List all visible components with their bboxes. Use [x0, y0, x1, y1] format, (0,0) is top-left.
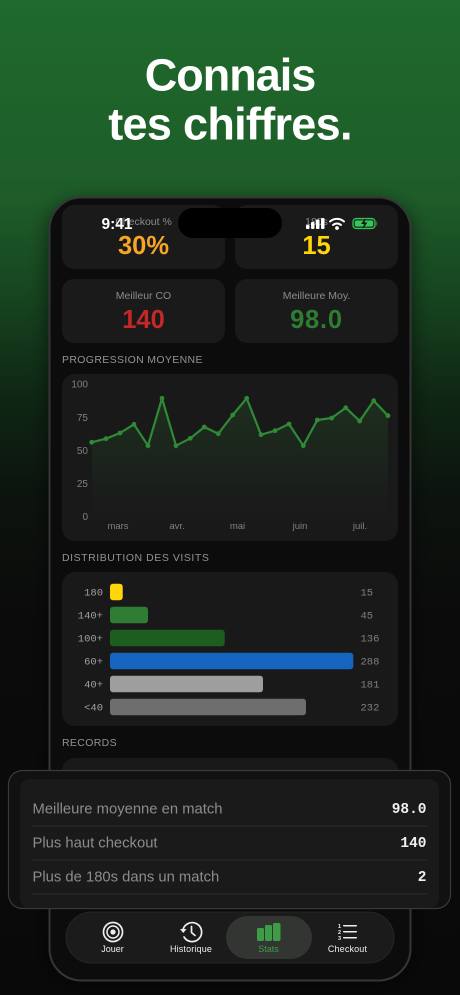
record row: best match average: Meilleure moyenne en match	[32, 802, 222, 818]
chart x axis labels: avr.	[169, 521, 185, 532]
bar row under 40	[84, 699, 379, 715]
chart y axis labels	[71, 380, 88, 523]
bar row 100+	[78, 630, 379, 646]
chart x axis labels: mars	[107, 521, 129, 532]
chart x axis labels: mai	[230, 521, 245, 532]
stat card: best checkout	[62, 279, 225, 343]
bar row 180: 15	[360, 588, 373, 600]
bar row 140+: 45	[360, 610, 373, 622]
selected tab pill	[226, 916, 312, 959]
phone shadow	[46, 200, 414, 985]
stat card: checkout: Checkout %	[115, 216, 172, 228]
phone frame	[50, 198, 410, 980]
record row: best match average	[32, 802, 428, 826]
chart line	[89, 396, 390, 448]
record row: most 180s: Plus de 180s dans un match	[32, 870, 219, 886]
title: Connais	[145, 50, 315, 100]
bar row under 40: 232	[360, 702, 379, 714]
chart area fill	[92, 398, 388, 516]
chart x axis labels: juil.	[352, 521, 367, 532]
chart y axis labels: 50	[77, 446, 88, 457]
bar row 40+: 181	[360, 680, 379, 692]
tab: Historique: Historique	[170, 944, 212, 954]
bar row 60+: 288	[360, 656, 379, 668]
tab: Checkout	[328, 924, 367, 954]
title: tes chiffres.	[108, 98, 352, 150]
panel: bar chart	[62, 572, 398, 726]
icon: battery	[353, 218, 377, 229]
bar row 100+: 136	[360, 634, 379, 646]
tab: Stats	[257, 923, 280, 954]
icon: wifi	[330, 219, 344, 229]
dynamic island	[178, 208, 282, 238]
tab: Historique	[170, 923, 212, 954]
stat card: 180s: 180s	[305, 216, 328, 228]
tab: Jouer	[101, 922, 124, 954]
stat card: 180s: 15	[302, 232, 331, 260]
bar row 180: 180	[84, 588, 103, 600]
tab: Checkout: 3	[338, 936, 341, 942]
chart y axis labels: 75	[77, 413, 88, 424]
bar row 140+: 140+	[78, 610, 103, 622]
record row: most 180s	[32, 870, 428, 894]
status bar time: 9:41	[101, 216, 133, 233]
bar row 60+	[84, 653, 379, 669]
panel: records overlay	[8, 770, 450, 908]
chart y axis labels: 0	[82, 512, 88, 523]
records card behind overlay	[62, 758, 398, 818]
heading: progression: PROGRESSION MOYENNE	[62, 354, 203, 366]
chart x axis labels: juin	[292, 521, 307, 532]
stat card: best checkout: Meilleur CO	[116, 290, 171, 302]
record row: most 180s: 2	[418, 870, 426, 886]
title	[108, 50, 352, 150]
record row: best match average: 98.0	[392, 802, 426, 818]
tab: Checkout: 2	[338, 930, 341, 936]
bar row under 40: <40	[84, 702, 103, 714]
tab: Jouer: Jouer	[101, 944, 124, 954]
tab: Checkout: Checkout	[328, 944, 367, 954]
stat card: best checkout: 140	[122, 306, 165, 334]
bar row 40+	[84, 676, 379, 692]
stat card: best average: Meilleure Moy.	[283, 290, 350, 302]
chart y axis labels: 25	[77, 479, 88, 490]
panel: line chart	[62, 374, 398, 541]
icon: signal	[306, 218, 324, 229]
stat card: 180s	[235, 205, 398, 269]
stat card: checkout	[62, 205, 225, 269]
heading: records: RECORDS	[62, 737, 117, 749]
stat card: checkout: 30%	[118, 232, 169, 260]
record row: highest checkout	[32, 836, 428, 860]
chart y axis labels: 100	[71, 380, 88, 390]
tab: Checkout: 1	[338, 924, 341, 930]
stat card: best average	[235, 279, 398, 343]
bar row 60+: 60+	[84, 656, 103, 668]
bar row 100+: 100+	[78, 634, 103, 646]
tab: Stats: Stats	[258, 944, 279, 954]
heading: distribution: DISTRIBUTION DES VISITS	[62, 552, 209, 564]
bar row 40+: 40+	[84, 680, 103, 692]
bar row 140+	[78, 607, 373, 623]
record row: highest checkout: 140	[400, 836, 426, 852]
chart x axis labels	[107, 521, 367, 532]
stat card: best average: 98.0	[290, 306, 343, 334]
bar row 180	[84, 584, 373, 600]
tab bar	[66, 912, 394, 963]
record row: highest checkout: Plus haut checkout	[32, 836, 158, 852]
